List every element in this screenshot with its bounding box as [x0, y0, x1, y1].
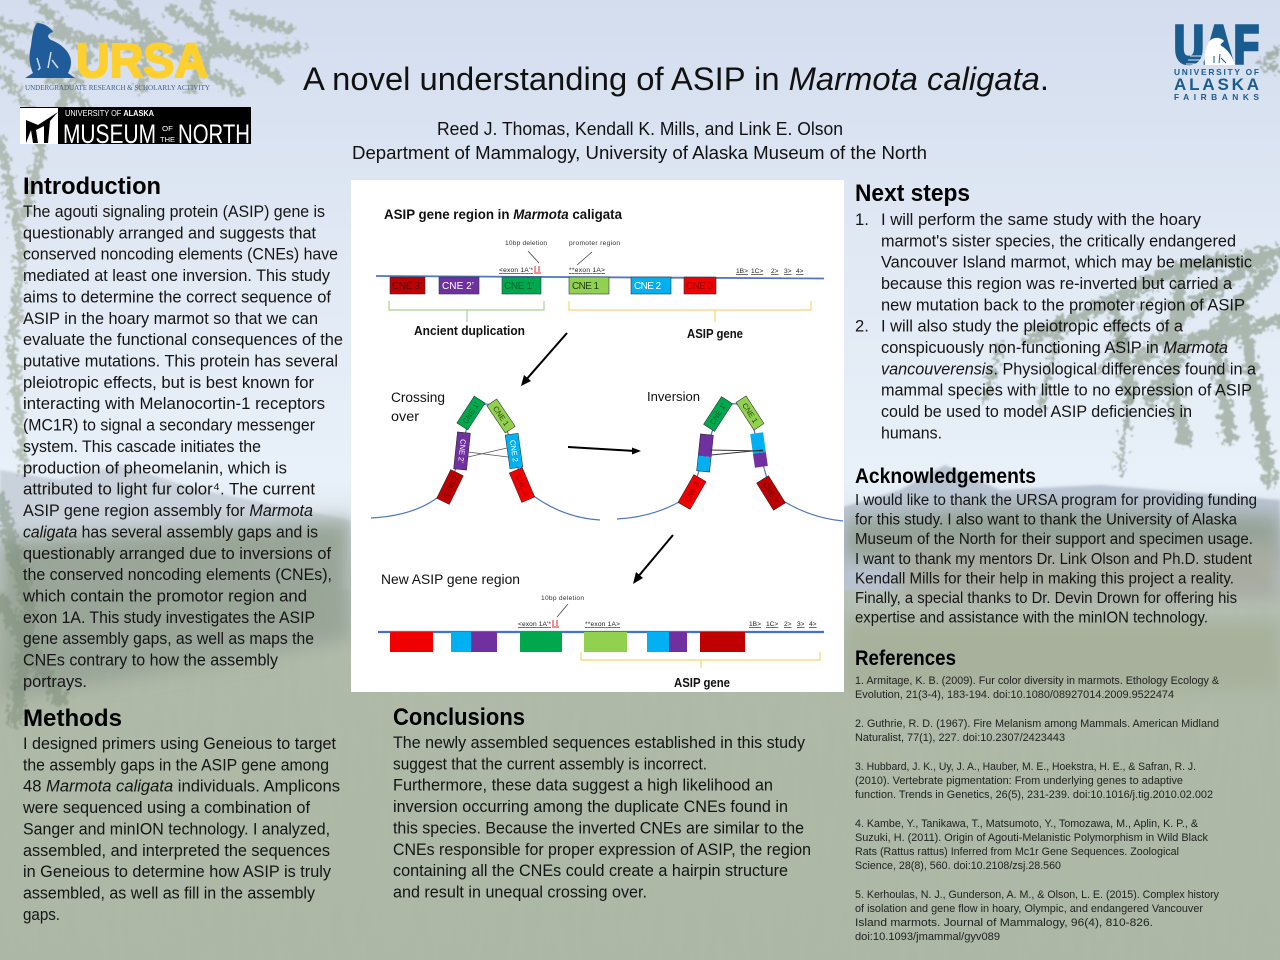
logo: Museum of the North: UNIVERSITY OF ALASKA: [65, 109, 154, 118]
diagram: ASIP gene region: promoter region: [569, 240, 620, 247]
logo: Museum of the North: [20, 107, 251, 149]
diagram: ASIP gene region: ASIP gene region in Marmota caligata: [384, 206, 622, 222]
text block: introduction body: attributed to light fur color⁴. The current: [23, 480, 315, 499]
text block: introduction body: exon 1A. This study investigates the ASIP: [23, 608, 315, 627]
diagram: inversion: CNE 3: [683, 480, 701, 504]
heading: Conclusions: Conclusions: [393, 704, 525, 731]
diagram: new ASIP gene region: 4>: [809, 621, 817, 628]
text block: methods body: in Geneious to determine how ASIP is truly: [23, 862, 332, 881]
text block: acknowledgements body: Finally, a special thanks to Dr. Devin Drown for offering his: [855, 590, 1237, 607]
text block: next steps list: 2.: [855, 317, 869, 336]
text block: reference list: Science, 28(8), 560. doi:10.2108/zsj.28.560: [855, 860, 1061, 872]
text block: conclusions body: suggest that the current assembly is incorrect.: [393, 754, 707, 773]
logo: Museum of the North: OF: [162, 126, 173, 133]
wordmark: URSA: [76, 35, 208, 88]
text block: introduction body: pleiotropic effects, but is best known for: [23, 373, 314, 392]
text block: acknowledgements body: Museum of the North for their support and specimen usage.: [855, 531, 1253, 548]
text block: next steps list: humans.: [881, 423, 942, 442]
diagram: new ASIP gene region: [378, 572, 824, 690]
text block: acknowledgements body: Kendall Mills for their help in making this project a reality.: [855, 570, 1234, 587]
diagram: inversion: CNE 3’: [761, 481, 781, 506]
text block: introduction body: the conserved noncoding elements (CNEs),: [23, 565, 332, 584]
text block: reference list: doi:10.1093/jmammal/gyv089: [855, 931, 1000, 943]
diagram: ASIP gene region: 1B>: [736, 268, 748, 275]
diagram: new ASIP gene region: ASIP gene: [674, 676, 730, 690]
diagram: ASIP gene region: 1C>: [751, 268, 763, 275]
panel: Acknowledgements: [855, 465, 1257, 627]
text block: introduction body: questionably arranged due to inversions of: [23, 544, 331, 563]
panel: References: [855, 647, 1220, 943]
heading: References: References: [855, 647, 956, 670]
text block: next steps list: conspicuously non-functioning ASIP in Marmota: [881, 338, 1228, 357]
text block: reference list: of isolation and gene flow in hoary, Olympic, and endangered Vancouver: [855, 903, 1203, 915]
text block: methods body: the assembly gaps in the ASIP gene among: [23, 755, 329, 774]
diagram: crossing over: CNE 2’: [456, 439, 468, 464]
text block: introduction body: mediated at least one inversion. This study: [23, 266, 331, 285]
diagram: inversion: CNE 1: [740, 401, 760, 425]
diagram: ASIP gene region: ASIP gene: [687, 327, 743, 341]
text block: acknowledgements body: for this study. I also want to thank the University of Alaska: [855, 512, 1237, 529]
text block: methods body: I designed primers using Geneious to target: [23, 734, 336, 753]
text block: introduction body: ASIP gene region assembly for Marmota: [23, 501, 313, 520]
tagline: UNDERGRADUATE RESEARCH & SCHOLARLY ACTIVITY: [25, 83, 211, 92]
text block: reference list: 1. Armitage, K. B. (2009). Fur color diversity in marmots. Ethology Ecology &: [855, 675, 1220, 687]
text block: introduction body: (MC1R) to signal a secondary messenger: [23, 416, 315, 435]
text block: next steps list: marmot's sister species, the critically endangered: [881, 231, 1236, 250]
text block: introduction body: interacting with Melanocortin-1 receptors: [23, 394, 325, 413]
logo: UAF: FAIRBANKS: [1174, 92, 1259, 102]
diagram: ASIP gene region: **exon 1A>: [569, 267, 605, 274]
text block: conclusions body: [393, 733, 811, 902]
text block: reference list: 4. Kambe, Y., Tanikawa, T., Matsumoto, Y., Tomozawa, M., Aplin, K. P., &: [855, 818, 1199, 830]
text block: introduction body: portrays.: [23, 672, 87, 691]
text block: next steps list: vancouverensis. Physiological differences found in a: [881, 359, 1257, 378]
text block: acknowledgements body: I would like to thank the URSA program for providing funding: [855, 492, 1257, 509]
diagram: crossing over: [371, 390, 600, 520]
text block: next steps list: new mutation back to the promoter region of ASIP: [881, 295, 1245, 314]
text block: introduction body: aims to determine the correct sequence of: [23, 287, 331, 306]
text block: next steps list: mammal species with little to no expression of ASIP: [881, 381, 1252, 400]
panel: Next steps: [855, 180, 1257, 442]
authors and affiliation: Reed J. Thomas, Kendall K. Mills, and Link E. Olson: [437, 119, 843, 139]
diagram: ASIP gene region: 3>: [784, 268, 792, 275]
icon: polar bear: [25, 23, 75, 78]
text block: introduction body: conserved noncoding elements (CNEs) have: [23, 245, 338, 264]
logo: Museum of the North: THE: [160, 137, 175, 144]
diagram: ASIP gene region: CNE 3: [686, 281, 713, 292]
text block: reference list: 3. Hubbard, J. K., Uy, J. A., Hauber, M. E., Hoekstra, H. E., & Safran, R. J.: [855, 761, 1196, 773]
diagram: crossing over: CNE 2: [508, 439, 520, 463]
diagram: new ASIP gene region: **exon 1A>: [585, 621, 620, 628]
text block: next steps list: I will also study the pleiotropic effects of a: [881, 317, 1184, 336]
diagram: new ASIP gene region: <exon 1A'*: [518, 621, 551, 628]
text block: introduction body: production of pheomelanin, which is: [23, 458, 287, 477]
diagram: crossing over: CNE 3’: [441, 474, 459, 500]
diagram: crossing over: over: [391, 409, 420, 424]
text block: next steps list: Vancouver Island marmot, which may be melanistic: [881, 253, 1252, 272]
tree branches: [0, 0, 1280, 720]
text block: next steps list: 1.: [855, 210, 869, 229]
text block: introduction body: caligata has several assembly gaps and is: [23, 522, 318, 541]
diagram: ASIP gene region: 4>: [796, 268, 804, 275]
diagram: ASIP gene region: CNE 3’: [392, 281, 422, 292]
text block: conclusions body: inversion occurring among the duplicate CNEs found in: [393, 797, 788, 816]
authors and affiliation: Department of Mammalogy, University of Alaska Museum of the North: [352, 143, 927, 163]
diagram: crossing over: CNE 3: [514, 473, 530, 497]
diagram: crossing over: CNE 1’: [461, 400, 481, 425]
heading: Acknowledgements: Acknowledgements: [855, 465, 1036, 488]
logo: UAF: [1174, 15, 1259, 102]
panel: central figure: [351, 180, 844, 692]
diagram: ASIP gene region: CNE 1’: [504, 281, 534, 292]
text block: introduction body: gene assembly gaps, as well as maps the: [23, 629, 314, 648]
arrow: [568, 447, 641, 454]
diagram: inversion: Inversion: [647, 389, 700, 404]
text block: reference list: [855, 675, 1220, 943]
diagram: new ASIP gene region: 10bp deletion: [541, 595, 584, 602]
diagram: new ASIP gene region: 1C>: [766, 621, 778, 628]
icon: polar bear: [1186, 38, 1235, 65]
arrow: [521, 333, 567, 386]
text block: introduction body: putative mutations. This protein has several: [23, 352, 338, 370]
text block: conclusions body: this species. Because the inverted CNEs are similar to the: [393, 818, 804, 837]
heading: Next steps: Next steps: [855, 180, 970, 207]
title: A novel understanding of ASIP in Marmota caligata.: [303, 61, 1049, 97]
text block: conclusions body: The newly assembled sequences established in this study: [393, 733, 806, 752]
text block: conclusions body: Furthermore, these data suggest a high likelihood an: [393, 776, 773, 795]
text block: reference list: function. Trends in Genetics, 26(5), 231-239. doi:10.1016/j.tig.2010.02.002: [855, 789, 1213, 801]
diagram: new ASIP gene region: 2>: [784, 621, 792, 628]
text block: reference list: Rats (Rattus rattus) Inferred from Mc1r Gene Sequences. Zoological: [855, 846, 1179, 858]
text block: reference list: 2. Guthrie, R. D. (1967). Fire Melanism among Mammals. American Midland: [855, 718, 1219, 730]
text block: introduction body: which contain the promotor region and: [22, 586, 307, 606]
text block: next steps list: because this region was re-inverted but carried a: [881, 274, 1233, 293]
text block: methods body: were sequenced using a combination of: [22, 798, 310, 817]
text block: reference list: Island marmots. Journal of Mammalogy, 96(4), 810-826.: [855, 917, 1153, 929]
text block: introduction body: The agouti signaling protein (ASIP) gene is: [23, 202, 325, 221]
text block: reference list: 5. Kerhoulas, N. J., Gunderson, A. M., & Olson, L. E. (2015). Complex history: [855, 889, 1220, 901]
diagram: ASIP gene region: CNE 1: [572, 281, 599, 292]
text block: conclusions body: and result in unequal crossing over.: [393, 882, 647, 902]
logo: UAF: ALASKA: [1174, 75, 1259, 94]
text block: reference list: Naturalist, 77(1), 227. doi:10.2307/2423443: [855, 732, 1065, 744]
diagram: inversion: [617, 389, 843, 521]
text block: reference list: (2010). Vertebrate pigmentation: From underlying genes to adaptive: [855, 775, 1183, 787]
text block: introduction body: system. This cascade initiates the: [23, 437, 261, 456]
logo: Museum of the North: MUSEUM: [63, 119, 156, 149]
diagram: ASIP gene region: 2>: [771, 268, 779, 275]
diagram: new ASIP gene region: New ASIP gene region: [381, 572, 520, 587]
logo: URSA: [25, 23, 211, 92]
text block: reference list: Suzuki, H. (2011). Origin of Agouti-Melanistic Polymorphism in Wild Black: [855, 832, 1209, 844]
diagram: ASIP gene region: 10bp deletion: [505, 240, 547, 247]
arrow: [633, 535, 673, 584]
panel: Conclusions: [393, 704, 811, 902]
diagram: crossing over: CNE 1: [491, 404, 511, 428]
text block: acknowledgements body: [855, 492, 1257, 627]
authors and affiliation: [352, 119, 927, 163]
diagram: inversion: CNE 1’: [708, 401, 728, 426]
text block: conclusions body: containing all the CNEs could create a hairpin structure: [393, 861, 788, 880]
text block: methods body: assembled, and interpreted the sequences: [23, 841, 330, 860]
text block: methods body: assembled, as well as fill in the assembly: [23, 884, 316, 902]
diagram: new ASIP gene region: 3>: [797, 621, 805, 628]
text block: introduction body: CNEs contrary to how the assembly: [23, 651, 279, 670]
text block: acknowledgements body: I want to thank my mentors Dr. Link Olson and Ph.D. student: [855, 551, 1253, 568]
text block: methods body: [22, 734, 340, 924]
diagram: ASIP gene region: CNE 2: [634, 281, 661, 292]
diagram: ASIP gene region: Ancient duplication: [414, 324, 525, 338]
text block: acknowledgements body: expertise and assistance with the minION technology.: [855, 610, 1208, 627]
text block: introduction body: questionably arranged and suggests that: [23, 223, 316, 242]
diagram: ASIP gene region: CNE 2’: [442, 281, 474, 292]
text block: next steps list: could be used to model ASIP deficiencies in: [881, 402, 1192, 421]
diagram: ASIP gene region: <exon 1A'*: [499, 267, 533, 274]
diagram: crossing over: Crossing: [391, 390, 445, 405]
logo: UAF: UNIVERSITY OF: [1174, 67, 1259, 77]
diagram: ASIP gene region: [376, 206, 824, 341]
text block: introduction body: [22, 202, 343, 691]
text block: next steps list: I will perform the same study with the hoary: [881, 210, 1202, 229]
heading: Introduction: Introduction: [23, 173, 161, 200]
text block: introduction body: ASIP in the hoary marmot so that we can: [23, 309, 318, 328]
text block: methods body: 48 Marmota caligata individuals. Amplicons: [23, 777, 340, 796]
text block: reference list: Evolution, 21(3-4), 183-194. doi:10.1080/08927014.2009.9522474: [855, 689, 1174, 701]
text block: next steps list: [855, 210, 1257, 442]
logo: Museum of the North: NORTH: [178, 119, 250, 149]
text block: methods body: Sanger and minION technology. I analyzed,: [23, 819, 330, 838]
text block: introduction body: evaluate the functional consequences of the: [23, 330, 343, 349]
diagram: new ASIP gene region: 1B>: [749, 621, 761, 628]
panel: Introduction: [22, 173, 343, 691]
heading: Methods: Methods: [23, 705, 122, 732]
panel: Methods: [22, 705, 340, 924]
text block: conclusions body: CNEs responsible for proper expression of ASIP, the region: [393, 840, 811, 859]
text block: methods body: gaps.: [23, 905, 60, 924]
